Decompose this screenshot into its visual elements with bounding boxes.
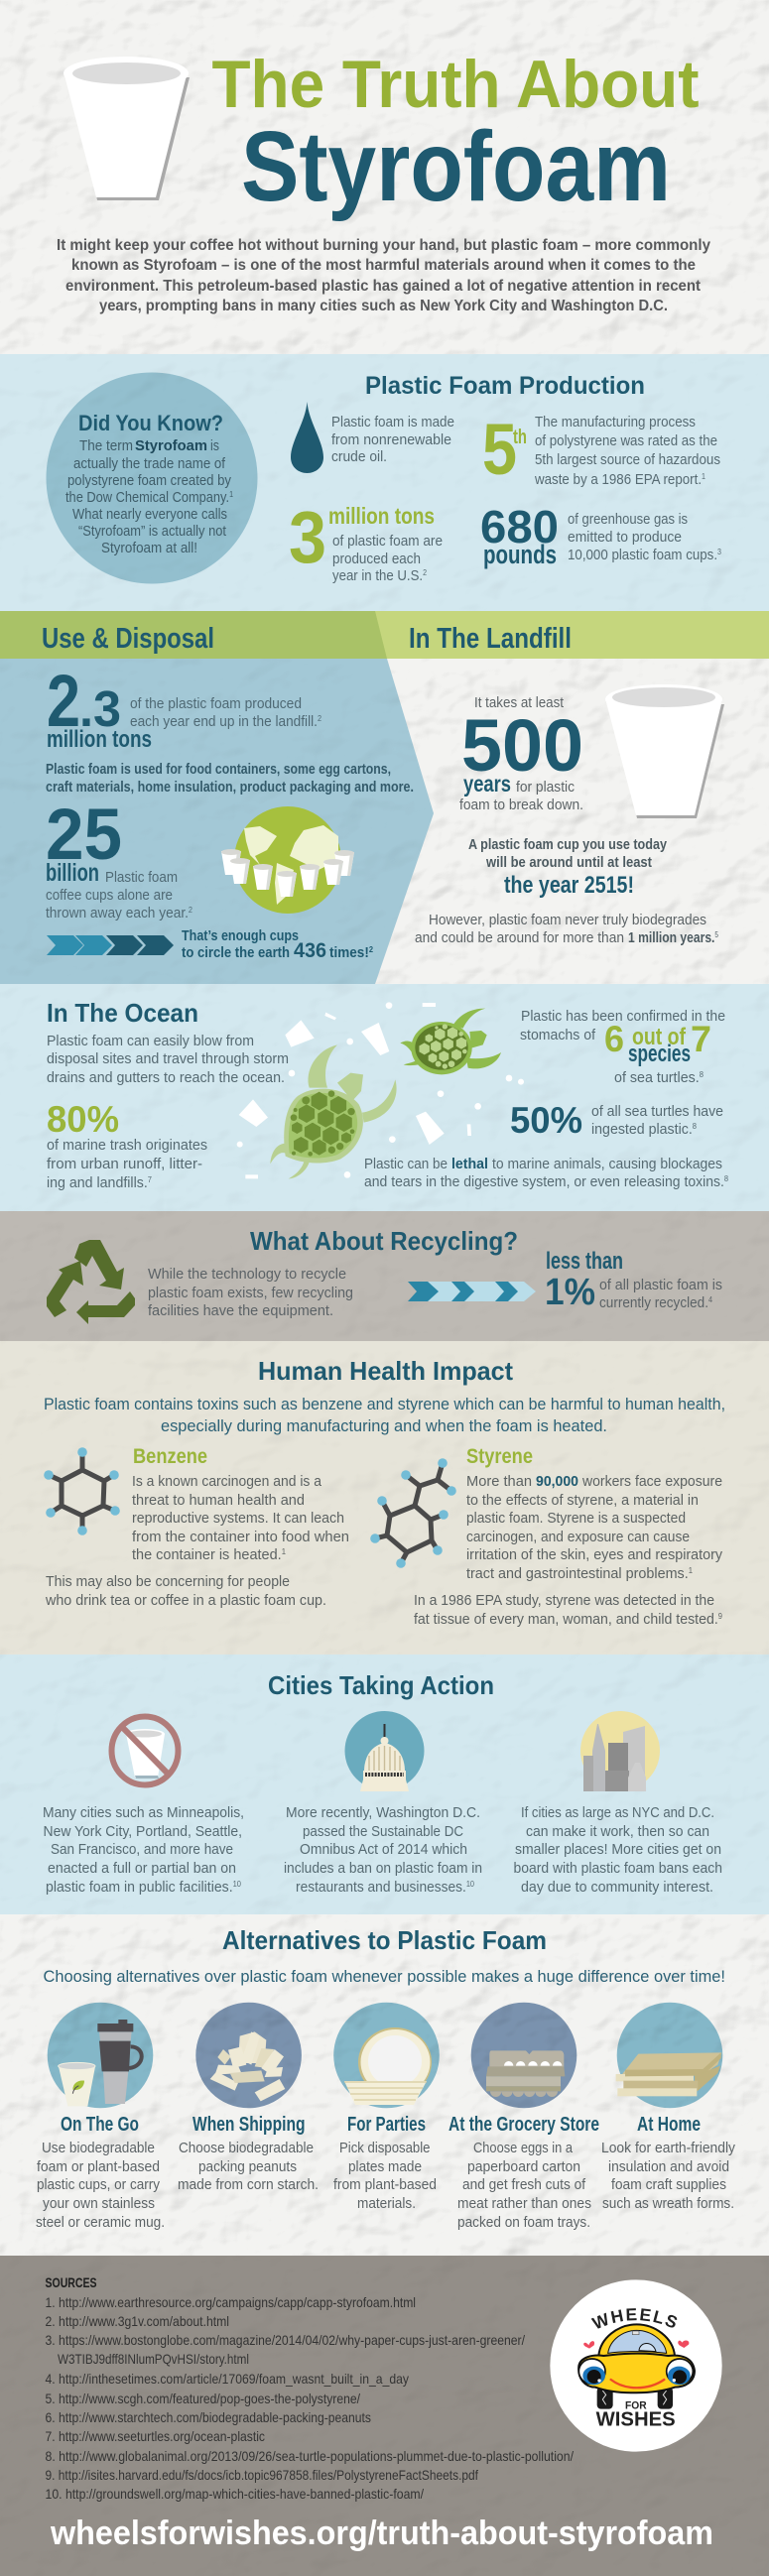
icon: banned cup (111, 1716, 179, 1785)
styrene text (414, 1473, 723, 1628)
3 million tons text: year in the U.S. (332, 567, 435, 584)
stat: 680 pounds: pounds (483, 540, 557, 569)
alternative headings (61, 2114, 701, 2136)
5th text (534, 414, 720, 488)
alternative headings: At the Grocery Store (449, 2114, 599, 2136)
cities column 2: includes a ban on plastic foam in (284, 1860, 482, 1877)
680 pounds text: 10,000 plastic foam cups. (568, 547, 736, 563)
sources list: 6. http://www.starchtech.com/biodegradable-packing-peanuts (46, 2409, 371, 2425)
2.3 text (130, 695, 321, 730)
on the go text: steel or ceramic mug. (36, 2214, 165, 2231)
year 2515 callout (468, 837, 667, 899)
stat: 2.3 million tons: .3 (79, 680, 121, 737)
panel: header (0, 0, 769, 355)
cities column 2: More recently, Washington D.C. (286, 1804, 480, 1821)
cities column 2 (284, 1804, 482, 1896)
styrene text: irritation of the skin, eyes and respiratory (466, 1546, 722, 1563)
biodegrade text: 5 (714, 930, 718, 939)
green header band (0, 611, 769, 659)
styrene text: to the effects of styrene, a material in (466, 1492, 699, 1509)
lethal text: and tears in the digestive system, or even releasing toxins. (364, 1173, 750, 1190)
stat: less than 1%: less than (546, 1248, 623, 1275)
3 million tons text: produced each (332, 551, 421, 567)
icon: large sea turtle (270, 1044, 397, 1178)
on the go text: your own stainless (43, 2195, 155, 2212)
heading: Alternatives to Plastic Foam (222, 1925, 547, 1955)
for parties text: plates made (348, 2158, 422, 2175)
health intro: Plastic foam contains toxins such as benzene and styrene which can be harmful to human health, (44, 1395, 725, 1413)
panel: alternatives to plastic foam (0, 1914, 769, 2256)
cities column 1: enacted a full or partial ban on (48, 1860, 236, 1877)
title: Styrofoam (241, 111, 671, 222)
stat: 2.3 million tons: million tons (47, 726, 152, 753)
stat: 3 million tons: 3 (289, 496, 326, 578)
sources list: 10. http://groundswell.org/map-which-cities-have-banned-plastic-foam/ (46, 2486, 424, 2502)
benzene text (45, 1473, 349, 1609)
year 2515 callout: the year 2515! (504, 872, 634, 899)
intro text: environment. This petroleum-based plastic has gained a lot of negative attention in recent (65, 278, 701, 295)
crude oil text: from nonrenewable (331, 431, 451, 448)
cities column 1 (43, 1804, 244, 1896)
circle the earth callout: 2 (369, 945, 374, 954)
500 years text: for plastic (516, 779, 575, 796)
500 years text: foam to break down. (459, 797, 583, 813)
icon: plates (344, 2027, 432, 2105)
heading: Plastic Foam Production (365, 372, 645, 400)
when shipping text (178, 2140, 319, 2193)
styrene text: In a 1986 EPA study, styrene was detected in the (414, 1592, 714, 1609)
logo: wheels for wishes: WISHES (596, 2409, 676, 2431)
biodegrade text: However, plastic foam never truly biodegrades (429, 912, 706, 928)
when shipping text: packing peanuts (198, 2158, 297, 2175)
680 pounds text: of greenhouse gas is (568, 511, 688, 528)
grocery store text: packed on foam trays. (457, 2214, 590, 2231)
logo: wheels for wishes: FOR (625, 2399, 647, 2411)
500 years text (459, 694, 583, 813)
stat: 6 out of 7 species: 7 (691, 1019, 711, 1059)
benzene text: Is a known carcinogen and is a (132, 1473, 322, 1490)
heading: What About Recycling? (250, 1226, 518, 1256)
stat: 6 out of 7 species (520, 1008, 725, 1086)
benzene text: 1 (282, 1547, 287, 1556)
cities column 2: restaurants and businesses. (296, 1879, 482, 1896)
did you know text (65, 411, 233, 556)
panel: in the ocean (0, 984, 769, 1211)
stat: 6 out of 7 species: species (628, 1041, 691, 1067)
circle the earth callout: to circle the earth (182, 945, 290, 961)
lethal text: lethal (451, 1156, 488, 1172)
title (212, 47, 699, 222)
did you know text: What nearly everyone calls (72, 507, 227, 523)
icon: packing peanuts (210, 2031, 285, 2101)
benzene text: threat to human health and (132, 1492, 305, 1509)
alternative headings: For Parties (347, 2114, 426, 2136)
plastic debris (237, 1002, 524, 1178)
for parties text: from plant-based (333, 2176, 437, 2193)
stat: 5th: th (513, 427, 527, 448)
cities column 3: smaller places! More cities get on (515, 1841, 721, 1858)
alternative headings: On The Go (61, 2114, 139, 2136)
icon: capitol dome (345, 1711, 425, 1791)
for parties text: Pick disposable (339, 2140, 431, 2156)
uses text: craft materials, home insulation, product packaging and more. (46, 780, 414, 796)
when shipping text: made from corn starch. (178, 2176, 319, 2193)
25 billion text: coffee cups alone are (46, 887, 173, 904)
for parties text (333, 2140, 437, 2212)
heading: In The Ocean (47, 998, 198, 1028)
ocean text: Plastic foam can easily blow from (47, 1033, 254, 1049)
1% text: 4 (708, 1295, 712, 1304)
crude oil text: Plastic foam is made (331, 414, 454, 430)
green header band: In The Landfill (409, 623, 572, 655)
icon: foam boards (616, 2052, 721, 2096)
stat: 2.3 million tons: 2 (47, 660, 80, 742)
cities column 3: day due to community interest. (521, 1879, 713, 1896)
styrene text: carcinogen, and exposure can cause (466, 1529, 690, 1545)
sources list: 3. https://www.bostonglobe.com/magazine/2014/04/02/why-paper-cups-just-aren-greener/ (46, 2332, 525, 2348)
cities column 2: Omnibus Act of 2014 which (300, 1841, 467, 1858)
stat: 5th: 5 (482, 410, 517, 490)
50% text: 8 (693, 1122, 698, 1131)
did you know text: Did You Know? (78, 411, 223, 435)
panel: sources and footer (0, 2256, 769, 2576)
heading: Human Health Impact (258, 1356, 513, 1386)
at home text: Look for earth-friendly (601, 2140, 735, 2156)
crude oil text: crude oil. (331, 448, 387, 465)
3 million tons text (332, 533, 443, 584)
25 billion text (46, 869, 192, 921)
panel: cities taking action (0, 1655, 769, 1914)
did you know text: is (210, 438, 219, 454)
5th text: 5th largest source of hazardous (535, 451, 720, 468)
stat: less than 1%: 1% (545, 1272, 595, 1313)
recycling text: facilities have the equipment. (148, 1302, 333, 1319)
sources list: W3TIBJ9dff8INlumPQvHSI/story.html (58, 2351, 249, 2367)
year 2515 callout: A plastic foam cup you use today (468, 837, 667, 853)
80% text: of marine trash originates (47, 1137, 207, 1154)
recycling text: While the technology to recycle (148, 1266, 346, 1283)
benzene text: from the container into food when (132, 1529, 349, 1545)
25 billion text: thrown away each year. (46, 905, 202, 921)
cities column 1: Many cities such as Minneapolis, (43, 1804, 244, 1821)
did you know text: Styrofoam at all! (101, 541, 197, 556)
circle the earth callout: 436 (294, 939, 326, 962)
sources heading: SOURCES (46, 2274, 97, 2290)
panel: human health impact (0, 1341, 769, 1655)
50% text (591, 1103, 723, 1138)
grocery store text: paperboard carton (467, 2158, 580, 2175)
health intro: especially during manufacturing and when the foam is heated. (161, 1416, 607, 1435)
year 2515 callout: will be around until at least (485, 855, 652, 871)
styrene text: tract and gastrointestinal problems. (466, 1565, 698, 1582)
stat: 25 billion: billion (46, 859, 99, 887)
500 years text: years (463, 771, 511, 797)
alternative headings: At Home (637, 2114, 701, 2136)
2.3 text: 2 (318, 714, 321, 723)
cities column 3: can make it work, then so can (526, 1823, 709, 1840)
intro text: known as Styrofoam – is one of the most harmful materials around when it comes to the (71, 257, 696, 274)
grocery store text: Choose eggs in a (473, 2140, 574, 2156)
5th text: The manufacturing process (535, 414, 696, 430)
cities column 3 (514, 1804, 722, 1896)
icon: egg carton (486, 2050, 565, 2097)
logo: wheels for wishes: WHEELS (591, 2308, 677, 2329)
cities column 1: New York City, Portland, Seattle, (44, 1823, 242, 1840)
grocery store text: and get fresh cuts of (462, 2176, 586, 2193)
stat: 80%: 80% (47, 1099, 119, 1140)
sources list: 4. http://inthesetimes.com/article/17069/foam_wasnt_built_in_a_day (46, 2371, 409, 2387)
2.3 text: of the plastic foam produced (130, 695, 302, 712)
did you know text: The term (79, 438, 133, 454)
icon: city skyline (580, 1711, 660, 1791)
2.3 text: each year end up in the landfill. (130, 713, 336, 730)
lethal text: 8 (724, 1174, 729, 1183)
did you know text: the Dow Chemical Company. (65, 490, 251, 506)
styrene text: 9 (718, 1612, 723, 1621)
icon: recycle arrows (47, 1240, 135, 1324)
styrene heading: Styrene (466, 1445, 533, 1468)
lethal text: to marine animals, causing blockages (492, 1156, 722, 1172)
sources list: 8. http://www.globalanimal.org/2013/09/26/sea-turtle-populations-plummet-due-to-plastic-pollution/ (46, 2448, 574, 2464)
styrene text: workers face exposure (581, 1473, 722, 1490)
crude oil text (331, 414, 454, 465)
80% text (47, 1137, 207, 1191)
3 million tons text: of plastic foam are (332, 533, 443, 550)
sources list: 7. http://www.seeturtles.org/ocean-plastic (46, 2428, 265, 2444)
cities column 3: If cities as large as NYC and D.C. (521, 1804, 714, 1821)
did you know text: “Styrofoam” is actually not (78, 524, 226, 540)
stat: 680 pounds: 680 (480, 501, 559, 552)
benzene text: This may also be concerning for people (46, 1573, 290, 1590)
benzene text: the container is heated. (132, 1546, 287, 1563)
styrene text: 90,000 (536, 1473, 578, 1490)
3 million tons text: 2 (423, 568, 427, 577)
alternative headings: When Shipping (192, 2114, 306, 2136)
ocean text: disposal sites and travel through storm (47, 1050, 289, 1067)
80% text: from urban runoff, litter- (47, 1156, 202, 1172)
stat: 6 out of 7 species: stomachs of (520, 1027, 596, 1043)
500 years text: 500 (461, 704, 583, 787)
uses text: Plastic foam is used for food containers, some egg cartons, (46, 762, 391, 778)
biodegrade text (415, 912, 718, 946)
icon: foam cup (64, 57, 190, 200)
icon: travel mug and paper cup (59, 2020, 142, 2106)
chevrons (408, 1282, 536, 1301)
cities column 1: San Francisco, and more have (51, 1841, 233, 1858)
left blue arrow panel (0, 659, 434, 984)
stat: 3 million tons (289, 496, 435, 578)
on the go text: plastic cups, or carry (37, 2176, 160, 2193)
styrene text: More than (466, 1473, 532, 1490)
cities column 2: 10 (466, 1880, 474, 1889)
did you know text: 1 (229, 490, 233, 499)
grocery store text: meat rather than ones (457, 2195, 591, 2212)
stat: 3 million tons: million tons (328, 503, 435, 529)
styrene text: plastic foam. Styrene is a suspected (466, 1510, 686, 1527)
circle the earth callout (182, 928, 374, 962)
recycling text (148, 1266, 353, 1319)
panel: use and disposal / in the landfill (0, 611, 769, 984)
stat: 6 out of 7 species: of sea turtles. (614, 1069, 704, 1086)
title: The Truth About (212, 47, 699, 122)
25 billion text: Plastic foam (105, 869, 178, 886)
logo: wheels for wishes (550, 2279, 722, 2452)
icon: foam cup landfill (605, 684, 724, 818)
stat: 6 out of 7 species: 8 (700, 1070, 705, 1079)
icon: styrene molecule (370, 1458, 456, 1568)
50% text: of all sea turtles have (591, 1103, 723, 1120)
5th text: 1 (702, 472, 705, 481)
at home text (601, 2140, 735, 2212)
when shipping text: Choose biodegradable (179, 2140, 314, 2156)
styrene text: 1 (689, 1566, 694, 1575)
lethal text (364, 1156, 729, 1190)
did you know text: actually the trade name of (73, 456, 226, 472)
cities column 2: passed the Sustainable DC (303, 1823, 463, 1840)
25 billion text: 2 (189, 906, 192, 915)
680 pounds text: 3 (717, 548, 721, 556)
1% text (599, 1277, 722, 1311)
sources list: 1. http://www.earthresource.org/campaigns/capp/capp-styrofoam.html (46, 2294, 416, 2310)
500 years text: It takes at least (474, 694, 565, 711)
stat: 6 out of 7 species: out of (632, 1024, 687, 1050)
for parties text: materials. (357, 2195, 416, 2212)
heading: Cities Taking Action (268, 1670, 494, 1700)
ocean text (47, 1033, 289, 1086)
680 pounds text: emitted to produce (568, 529, 682, 546)
benzene heading: Benzene (133, 1445, 207, 1468)
biodegrade text: and could be around for more than (415, 929, 624, 946)
1% text: of all plastic foam is (599, 1277, 722, 1293)
intro text: years, prompting bans in many cities such as New York City and Washington D.C. (99, 298, 668, 314)
sources list: 5. http://www.scgh.com/featured/pop-goes-the-polystyrene/ (46, 2391, 360, 2406)
at home text: such as wreath forms. (602, 2195, 734, 2212)
biodegrade text: 1 million years. (628, 929, 735, 946)
did you know text: Styrofoam (135, 438, 207, 454)
5th text: of polystyrene was rated as the (535, 432, 717, 449)
sources list: 9. http://isites.harvard.edu/fs/docs/icb.topic967858.files/PolystyreneFactSheets.pdf (46, 2467, 478, 2483)
recycling text: plastic foam exists, few recycling (148, 1285, 353, 1301)
stat: 2.3 million tons (47, 660, 152, 753)
lethal text: Plastic can be (364, 1156, 448, 1172)
stat: less than 1% (545, 1248, 623, 1313)
80% text: ing and landfills. (47, 1174, 154, 1191)
ocean text: drains and gutters to reach the ocean. (47, 1069, 285, 1086)
stat: 6 out of 7 species: Plastic has been confirmed in the (521, 1008, 725, 1025)
stat: 6 out of 7 species: 6 (604, 1019, 624, 1059)
icon: oil drop (291, 402, 323, 473)
benzene text: reproductive systems. It can leach (132, 1510, 344, 1527)
at home text: foam craft supplies (611, 2176, 726, 2193)
on the go text: Use biodegradable (42, 2140, 155, 2156)
styrene text: fat tissue of every man, woman, and child tested. (414, 1611, 736, 1628)
icon: small sea turtle (400, 1009, 501, 1074)
1% text: currently recycled. (599, 1294, 720, 1311)
icon: benzene molecule (44, 1447, 120, 1535)
80% text: 7 (148, 1175, 153, 1184)
cities column 1: plastic foam in public facilities. (46, 1879, 245, 1896)
at home text: insulation and avoid (608, 2158, 729, 2175)
chevrons (47, 935, 174, 955)
benzene text: who drink tea or coffee in a plastic foam cup. (45, 1592, 326, 1609)
sources list: 2. http://www.3g1v.com/about.html (46, 2313, 229, 2329)
on the go text (36, 2140, 165, 2231)
sources list (46, 2294, 574, 2502)
health intro (44, 1395, 725, 1435)
alternatives intro: Choosing alternatives over plastic foam whenever possible makes a huge difference over time! (44, 1967, 725, 1986)
5th text: waste by a 1986 EPA report. (535, 471, 722, 488)
cities column 3: board with plastic foam bans each (514, 1860, 722, 1877)
panel: what about recycling (0, 1211, 769, 1341)
stat: 25 billion: 25 (46, 795, 122, 875)
circle the earth callout: That’s enough cups (182, 928, 299, 944)
stat: 50%: 50% (510, 1100, 582, 1141)
uses text (46, 762, 414, 796)
intro text: It might keep your coffee hot without burning your hand, but plastic foam – more commonly (57, 237, 710, 254)
50% text: ingested plastic. (591, 1121, 699, 1138)
grocery store text (457, 2140, 591, 2231)
did you know text: polystyrene foam created by (67, 473, 232, 489)
green header band: Use & Disposal (42, 623, 214, 655)
intro text (57, 237, 710, 314)
footer url: wheelsforwishes.org/truth-about-styrofoam (50, 2515, 713, 2552)
on the go text: foam or plant-based (37, 2158, 160, 2175)
panel: plastic foam production (0, 354, 769, 611)
circle the earth callout: times! (329, 945, 372, 961)
did you know circle (46, 373, 258, 583)
icon: earth with cups (221, 806, 354, 914)
cities column 1: 10 (233, 1880, 242, 1889)
680 pounds text (568, 511, 721, 563)
